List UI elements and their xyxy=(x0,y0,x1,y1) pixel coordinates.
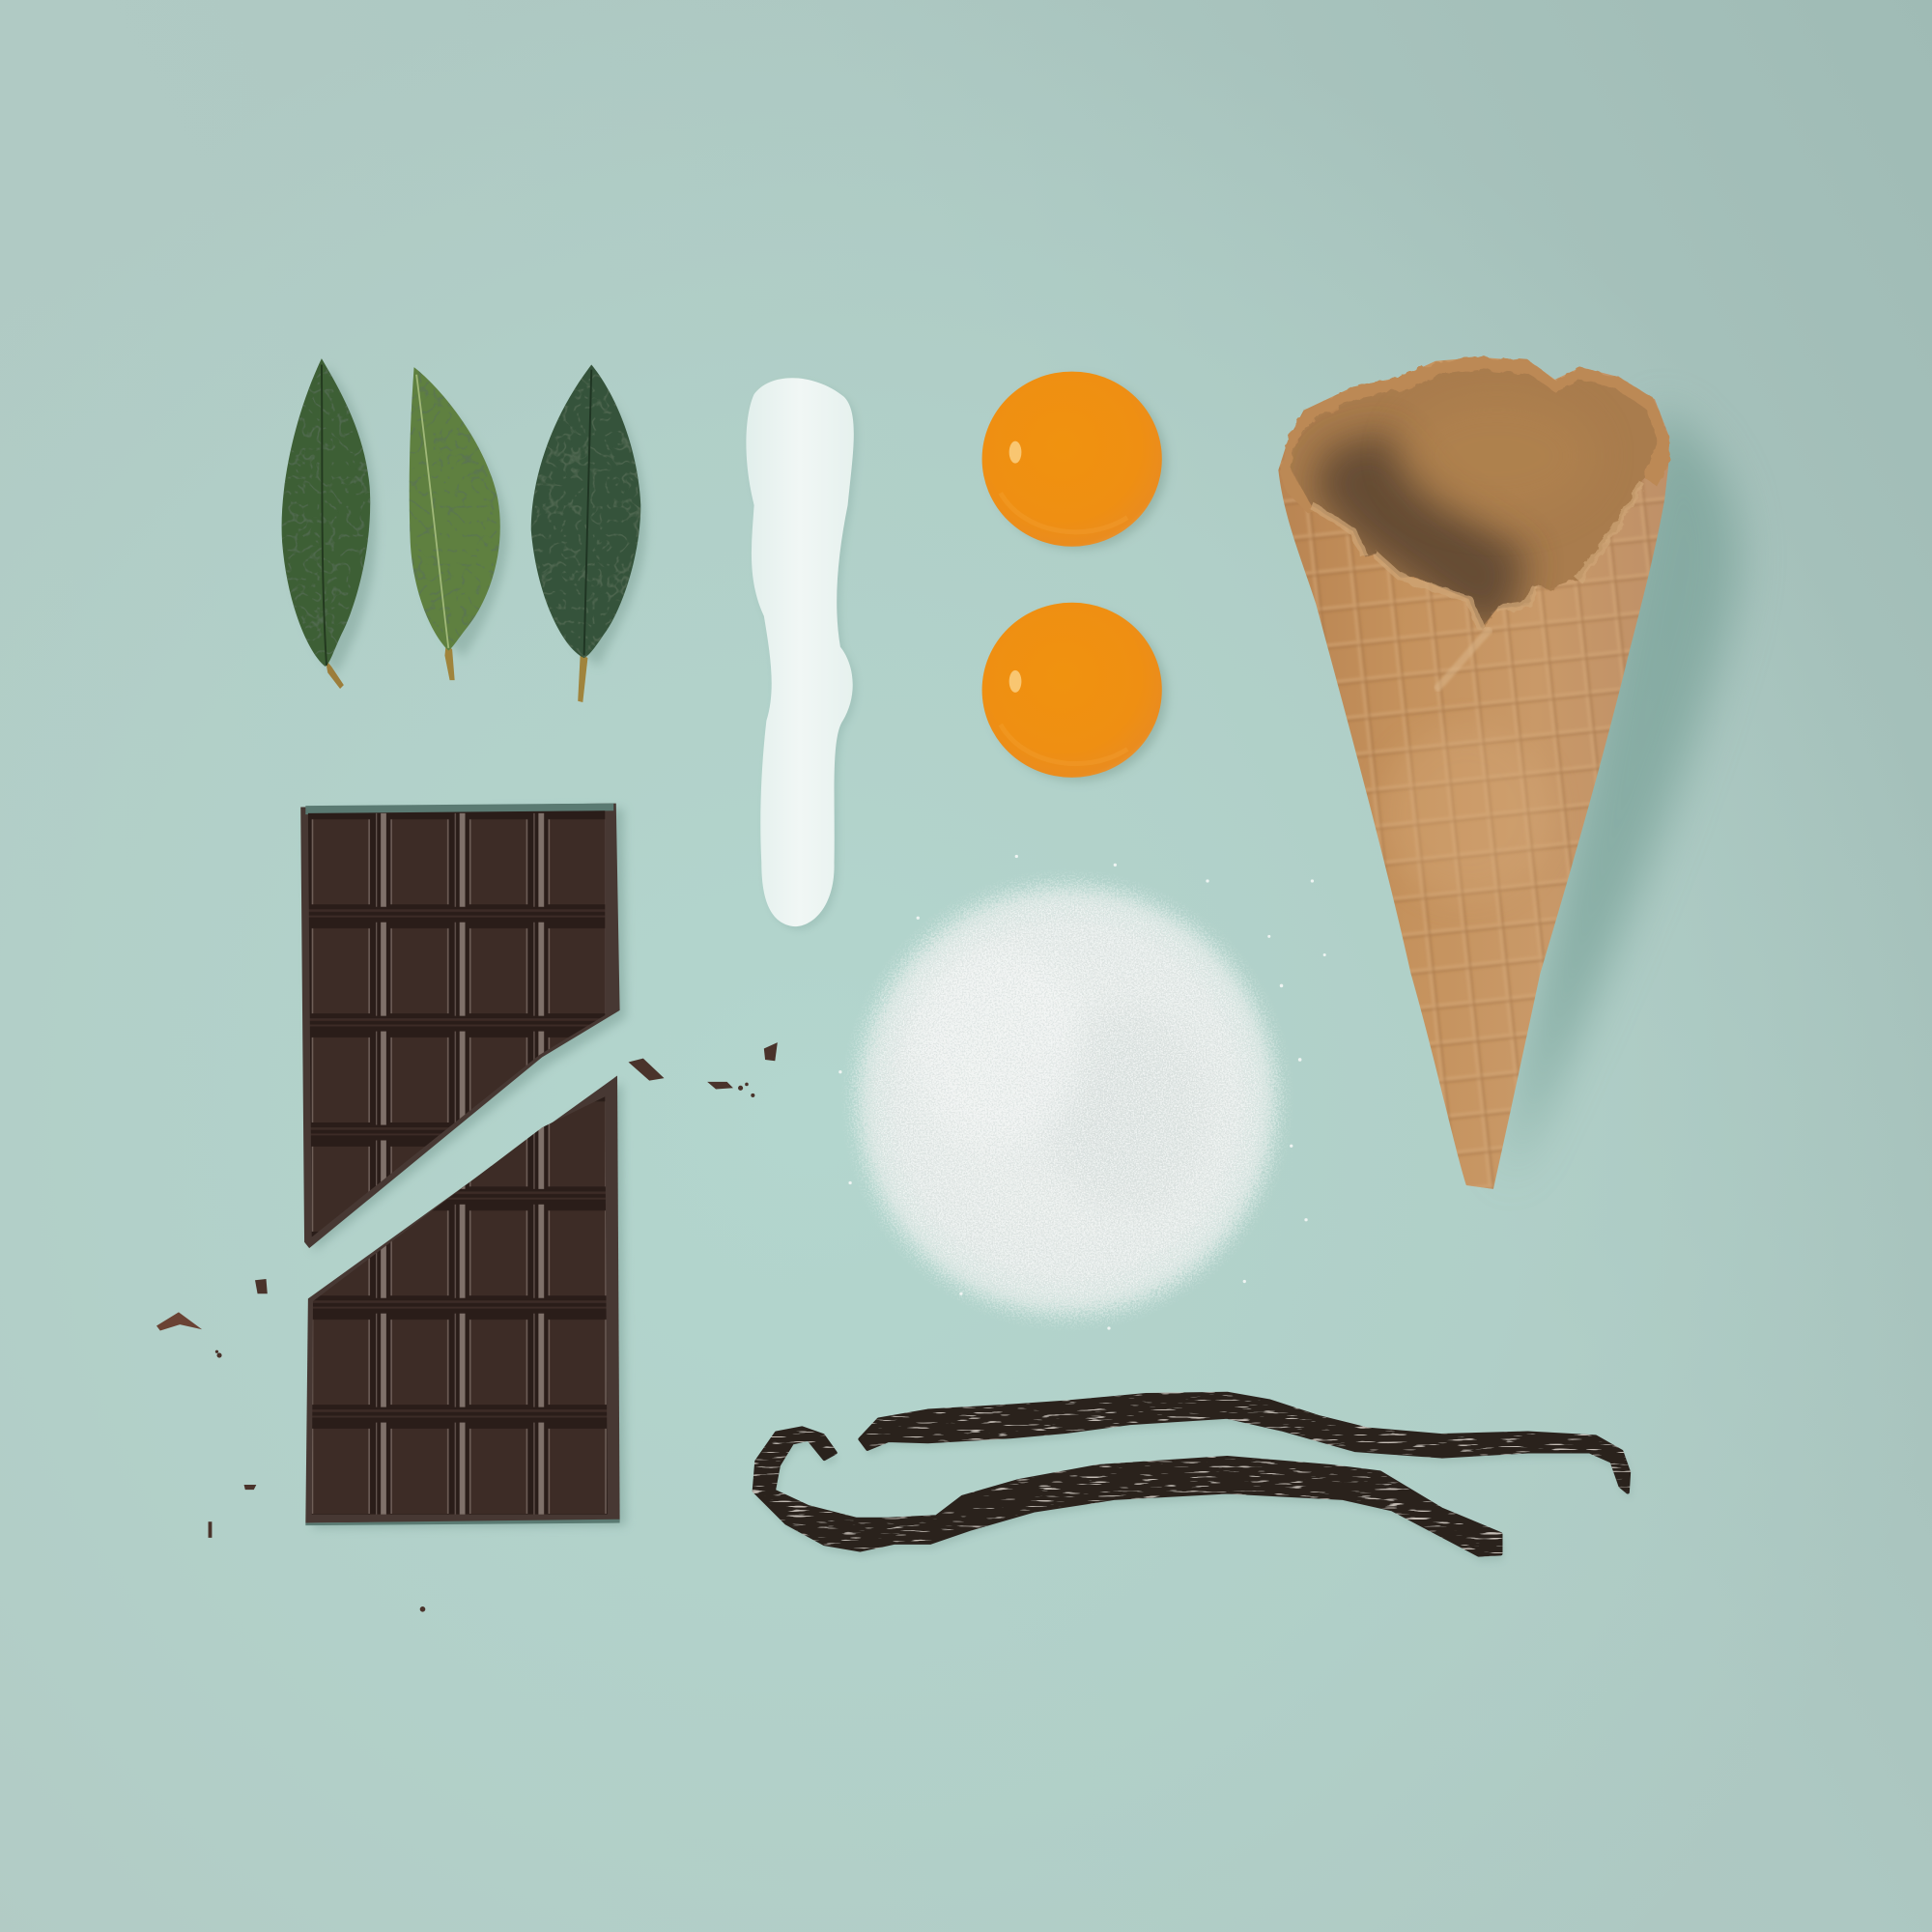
cone opening xyxy=(1290,370,1658,629)
icon: leaf middle xyxy=(410,367,508,680)
panel: mint leaves xyxy=(282,358,646,702)
panel: vanilla beans xyxy=(754,1394,1632,1561)
cone rim xyxy=(1278,357,1669,518)
icon: egg yolk top xyxy=(982,372,1167,550)
icon: sugar pile xyxy=(838,855,1326,1332)
icon: leaf right xyxy=(531,365,646,702)
icon: leaf left xyxy=(282,358,376,689)
chocolate crumbs xyxy=(156,1042,778,1612)
icon: egg yolk bottom xyxy=(982,603,1167,781)
panel: milk xyxy=(746,378,858,930)
chocolate lower piece xyxy=(305,1076,626,1528)
panel: chocolate bar xyxy=(156,804,778,1612)
icon: vanilla bean lower xyxy=(754,1428,1503,1561)
chocolate upper piece xyxy=(300,804,626,1252)
cone broken edge highlight xyxy=(1311,483,1642,629)
icon: vanilla bean upper xyxy=(860,1394,1632,1498)
cone shadow xyxy=(1506,407,1739,1185)
icon: waffle cone xyxy=(1278,355,1671,1189)
